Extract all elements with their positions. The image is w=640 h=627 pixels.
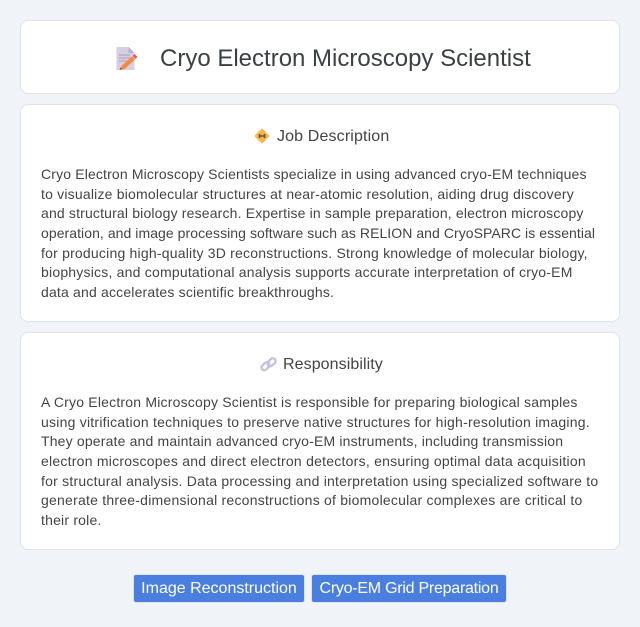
- text: to visualize biomolecular structures at near-atomic resolution, aiding drug discovery: [41, 186, 574, 202]
- text: job description: [41, 166, 595, 300]
- text: for structural analysis. Data processing and interpretation using specialized software to: [41, 473, 598, 489]
- text: generate three-dimensional reconstructions of biomolecular complexes are critical to: [41, 492, 582, 508]
- text: for producing high-quality 3D reconstructions. Strong knowledge of molecular biology,: [41, 245, 588, 261]
- icon: chain link: [260, 357, 277, 372]
- text: their role.: [41, 512, 102, 528]
- heading: job description: Job Description: [277, 128, 389, 145]
- title: Cryo Electron Microscopy Scientist: [160, 45, 531, 72]
- panel: job description: [20, 104, 620, 322]
- tag: cryo-em grid preparation: Cryo-EM Grid Preparation: [320, 580, 498, 597]
- text: data and accelerates scientific breakthroughs.: [41, 284, 334, 300]
- text: They operate and maintain advanced cryo-EM instruments, including transmission: [41, 433, 563, 449]
- icon: document with pencil: [116, 47, 138, 70]
- tag: cryo-em grid preparation: [311, 574, 507, 603]
- text: using vitrification techniques to preserve native structures for high-resolution imaging.: [41, 414, 590, 430]
- text: biophysics, and computational analysis supports accurate interpretation of cryo-EM: [41, 264, 573, 280]
- text: operation, and image processing software such as RELION and CryoSPARC is essential: [41, 225, 595, 241]
- text: electron microscopes and direct electron detectors, ensuring optimal data acquisition: [41, 453, 586, 469]
- icon: diamond sign: [254, 128, 270, 144]
- text: and structural biology research. Expertise in sample preparation, electron microscopy: [41, 205, 584, 221]
- heading: responsibility: Responsibility: [283, 356, 383, 373]
- tag: image reconstruction: Image Reconstruction: [141, 580, 297, 597]
- panel: title: [20, 20, 620, 94]
- text: Cryo Electron Microscopy Scientists specialize in using advanced cryo-EM techniques: [41, 166, 587, 182]
- text: A Cryo Electron Microscopy Scientist is responsible for preparing biological samples: [41, 394, 578, 410]
- text: responsibility: [41, 394, 598, 528]
- tag: image reconstruction: [133, 574, 305, 603]
- panel: responsibility: [20, 332, 620, 550]
